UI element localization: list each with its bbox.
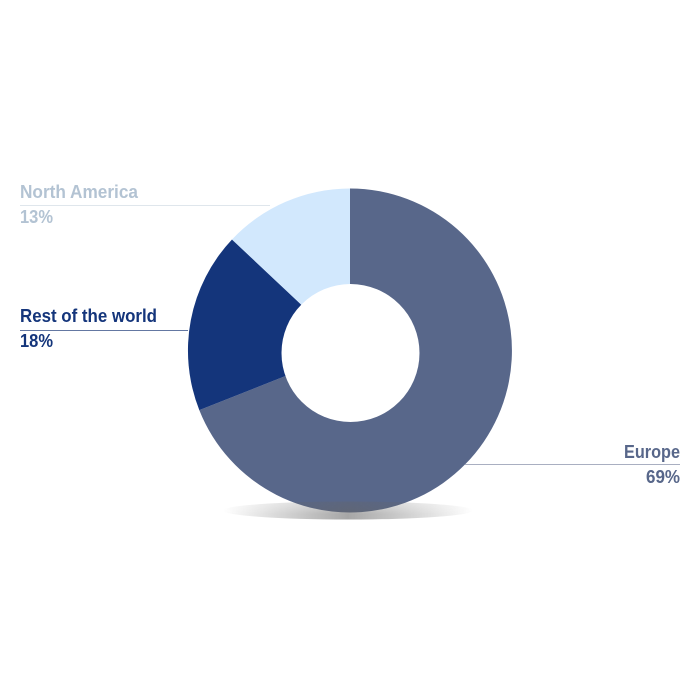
donut chart infographic xyxy=(20,184,680,520)
label: Europe: 69% xyxy=(646,467,680,487)
label: Rest of the world: Rest of the world xyxy=(20,306,157,326)
ground shadow xyxy=(223,502,473,520)
label: Europe xyxy=(465,442,680,487)
label: North America xyxy=(20,182,270,227)
donut chart xyxy=(188,188,512,512)
donut hole xyxy=(282,284,420,422)
label: North America: 13% xyxy=(20,207,53,227)
label: Rest of the world: 18% xyxy=(20,331,53,351)
slice: Europe 69% xyxy=(199,188,512,512)
label: North America: North America xyxy=(20,182,139,202)
label: Europe: Europe xyxy=(624,442,680,462)
slice: North America 13% xyxy=(232,188,350,350)
label: Rest of the world xyxy=(20,306,188,351)
slice: Rest of the world 18% xyxy=(188,240,350,410)
